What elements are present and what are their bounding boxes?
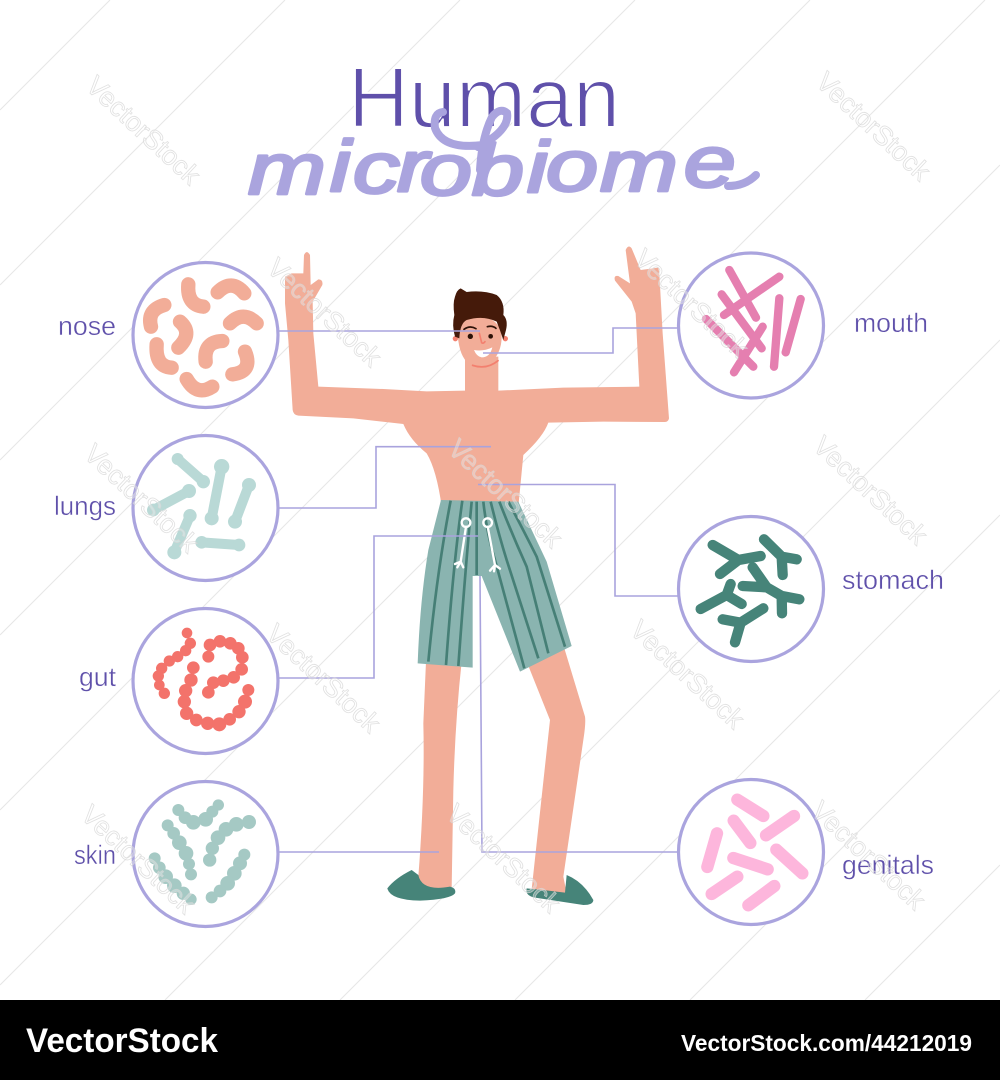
ears [453, 336, 508, 341]
right slipper [526, 875, 593, 905]
bacteria: stomach [701, 539, 799, 642]
footer brand: VectorStock [26, 1022, 218, 1060]
title [248, 51, 756, 211]
watermarks: VectorStock [261, 252, 387, 373]
label: nose: nose [58, 311, 116, 341]
face [457, 317, 502, 365]
bacteria: gut [153, 628, 254, 731]
left leg [418, 662, 462, 891]
label: mouth: mouth [854, 308, 928, 338]
watermarks: VectorStock [810, 66, 936, 187]
torso and arms [285, 247, 669, 507]
bacteria: lungs [147, 453, 256, 559]
watermarks: VectorStock [75, 799, 201, 920]
watermarks: VectorStock [440, 798, 566, 919]
panel: skin [133, 782, 278, 926]
circle: skin [133, 782, 278, 926]
label: lungs: lungs [54, 491, 116, 521]
hair [453, 288, 507, 340]
watermarks: VectorStock [260, 618, 386, 739]
drawstrings [455, 518, 500, 571]
panel: nose [133, 262, 278, 408]
connector lines [279, 328, 679, 852]
watermarks: VectorStock [628, 243, 754, 364]
left slipper [387, 870, 455, 901]
circle: stomach [678, 516, 824, 662]
panel: stomach [678, 516, 824, 662]
panel: mouth [678, 253, 824, 398]
circle: mouth [678, 253, 824, 398]
panel: genitals [678, 780, 824, 924]
facial features [464, 326, 498, 367]
watermarks: VectorStock [805, 795, 931, 916]
bacteria: skin [149, 799, 256, 905]
heading: microbiome: microbiome [248, 121, 736, 211]
circle: nose [133, 262, 278, 408]
label: skin: skin [74, 840, 116, 870]
flourish: script loop and tail [435, 111, 756, 186]
panel: lungs [133, 436, 278, 580]
bacteria: mouth [706, 270, 801, 372]
shorts [418, 500, 572, 672]
bacteria: nose [150, 284, 257, 390]
label: genitals: genitals [842, 850, 934, 880]
circle: gut [133, 608, 278, 754]
bacteria: genitals [707, 800, 802, 905]
label: stomach: stomach [842, 565, 944, 595]
circle: lungs [133, 436, 278, 580]
legs, shorts and slippers [387, 500, 593, 905]
figure: man [285, 247, 669, 507]
watermarks: VectorStock [442, 433, 568, 554]
watermarks: VectorStock [78, 438, 204, 559]
label: gut: gut [79, 662, 116, 692]
watermarks: VectorStock [624, 614, 750, 735]
watermarks: VectorStock [807, 430, 933, 551]
right leg [527, 645, 585, 893]
footer bar [0, 1000, 1000, 1080]
footer image id: VectorStock.com/44212019 [681, 1030, 972, 1056]
heading: Human: Human [348, 51, 620, 146]
panel: gut [133, 608, 278, 754]
shorts stripes [428, 501, 565, 668]
watermarks [75, 66, 936, 920]
watermarks: VectorStock [80, 70, 206, 191]
circle: genitals [678, 780, 824, 924]
